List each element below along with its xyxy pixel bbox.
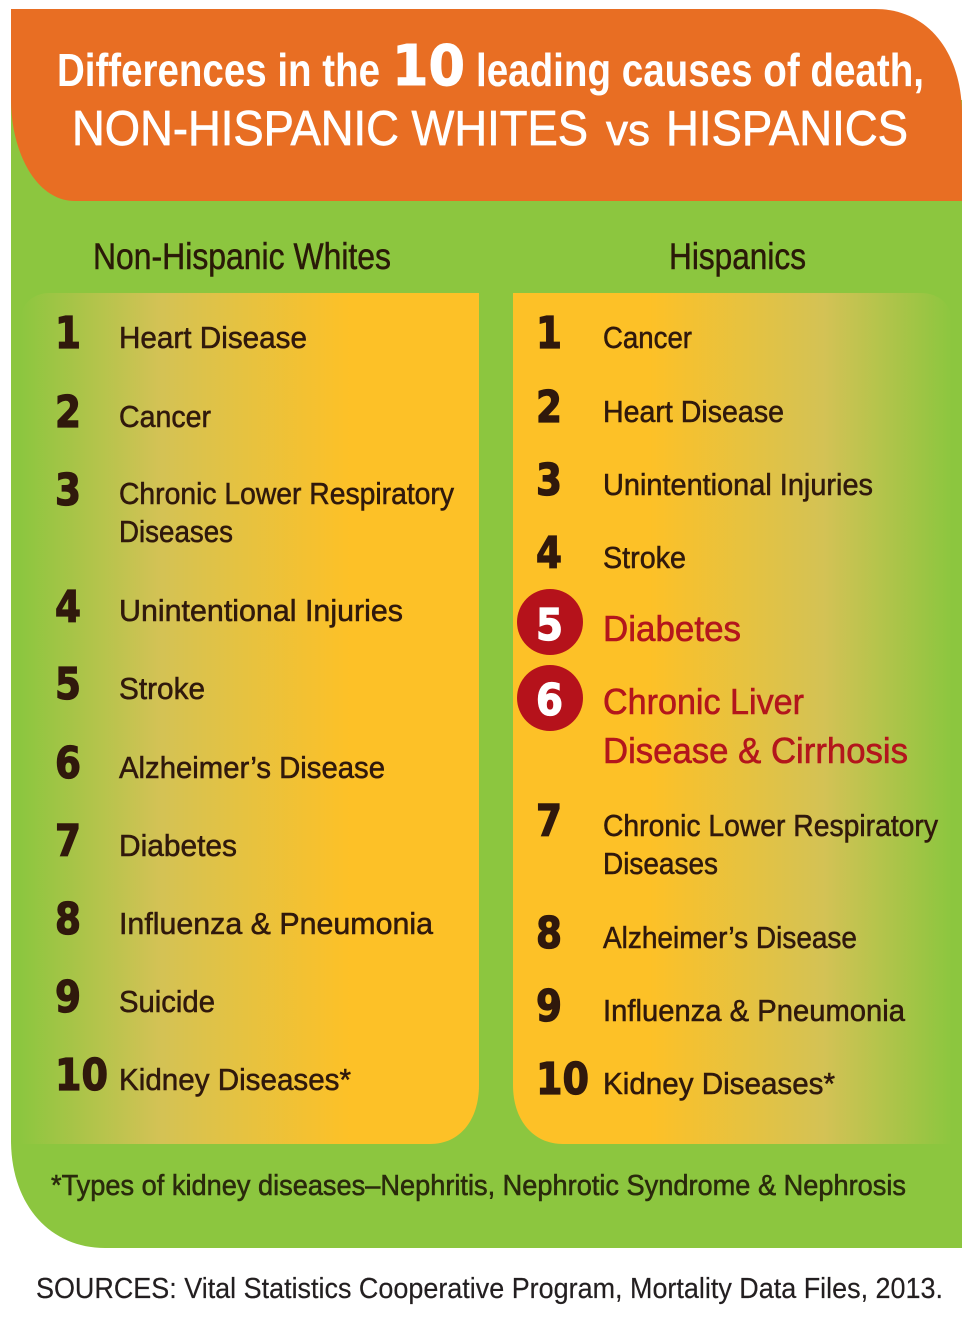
footnote: *Types of kidney diseases–Nephritis, Nephrotic Syndrome & Nephrosis — [51, 1170, 906, 1202]
item 9 — [55, 972, 215, 1023]
title: 10 — [392, 34, 465, 99]
title: HISPANICS — [666, 102, 908, 156]
item 8: Alzheimer’s Disease — [603, 920, 857, 955]
panel: Hispanics list — [513, 293, 952, 1144]
heading: Hispanics: Hispanics — [669, 236, 806, 277]
item 9: Influenza & Pneumonia — [603, 993, 906, 1028]
item 8: Influenza & Pneumonia — [119, 906, 434, 941]
panel: non-Hispanic whites list — [20, 293, 479, 1144]
title: Differences in the — [57, 44, 380, 96]
item 10: Kidney Diseases* — [603, 1066, 835, 1101]
heading: Non-Hispanic Whites: Non-Hispanic Whites — [93, 236, 391, 277]
item 5 — [55, 659, 205, 710]
item 9 — [536, 981, 906, 1032]
item 1 — [536, 308, 692, 359]
item 6 highlighted: Disease & Cirrhosis — [603, 730, 908, 771]
item 3: Unintentional Injuries — [603, 467, 873, 502]
item 2 — [536, 382, 784, 433]
item 1: Heart Disease — [119, 320, 307, 355]
item 2: Heart Disease — [603, 394, 784, 429]
item 9: 9 — [55, 972, 81, 1023]
item 7: Diseases — [603, 846, 718, 881]
item 3: Chronic Lower Respiratory — [119, 476, 454, 511]
item 5: 5 — [55, 659, 81, 710]
item 10: 10 — [536, 1054, 589, 1105]
item 4: Unintentional Injuries — [119, 593, 403, 628]
title: NON-HISPANIC WHITES — [72, 102, 588, 156]
item 3: 3 — [536, 455, 562, 506]
item 3 — [55, 465, 454, 549]
item 5 highlighted: 5 — [536, 600, 563, 651]
item 9: 9 — [536, 981, 562, 1032]
item 8 — [536, 908, 857, 959]
item 6: 6 — [55, 738, 81, 789]
item 5 highlighted — [517, 589, 741, 655]
title: vs — [606, 106, 650, 155]
item 7: 7 — [55, 816, 81, 867]
item 10 — [536, 1054, 835, 1105]
item 8: 8 — [536, 908, 562, 959]
item 8: 8 — [55, 894, 81, 945]
item 3: 3 — [55, 465, 81, 516]
item 2 — [55, 387, 211, 438]
item 1: 1 — [55, 308, 81, 359]
item 7: 7 — [536, 796, 562, 847]
item 4 — [536, 528, 686, 579]
orange title banner — [11, 9, 962, 201]
item 6 — [55, 738, 385, 789]
item 7 — [55, 816, 237, 867]
item 5: Stroke — [119, 671, 205, 706]
item 7: Diabetes — [119, 828, 237, 863]
item 1: Cancer — [603, 320, 692, 355]
item 6 highlighted — [517, 665, 908, 771]
item 2: 2 — [536, 382, 562, 433]
item 10: Kidney Diseases* — [119, 1062, 351, 1097]
item 3: Diseases — [119, 514, 233, 549]
item 2: 2 — [55, 387, 81, 438]
item 9: Suicide — [119, 984, 215, 1019]
item 4 — [55, 582, 403, 633]
item 2: Cancer — [119, 399, 211, 434]
item 10 — [55, 1050, 351, 1101]
item 3 — [536, 455, 873, 506]
item 1: 1 — [536, 308, 562, 359]
item 6: Alzheimer’s Disease — [119, 750, 385, 785]
item 7 — [536, 796, 938, 881]
item 4: 4 — [536, 528, 562, 579]
item 10: 10 — [55, 1050, 108, 1101]
item 1 — [55, 308, 307, 359]
item 6 highlighted: Chronic Liver — [603, 681, 804, 722]
item 5 highlighted: Diabetes — [603, 608, 741, 649]
title — [57, 34, 924, 156]
item 4: 4 — [55, 582, 81, 633]
item 8 — [55, 894, 434, 945]
item 4: Stroke — [603, 540, 686, 575]
item 7: Chronic Lower Respiratory — [603, 808, 938, 843]
item 6 highlighted: 6 — [536, 675, 563, 726]
